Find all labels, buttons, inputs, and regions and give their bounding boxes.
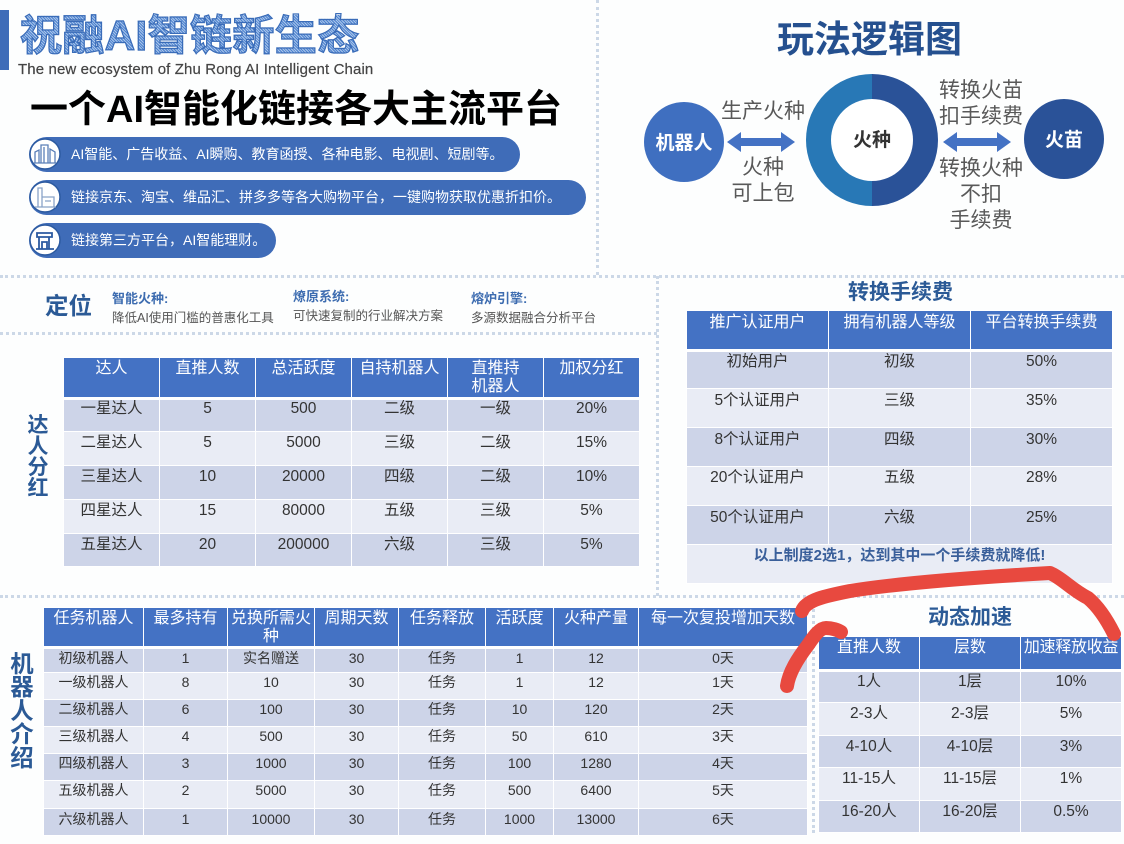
table: task robots: 610 xyxy=(584,728,608,744)
table: expert dividends: 5 xyxy=(203,434,212,451)
table: expert dividends: 200000 xyxy=(278,536,329,553)
table: conversion fee: 8个认证用户 xyxy=(714,431,801,448)
table: task robots: 任务机器人 xyxy=(53,610,134,627)
table: dynamic acceleration xyxy=(819,637,1121,832)
table: task robots: 3 xyxy=(182,755,189,771)
table: expert dividends: 15% xyxy=(576,434,607,451)
table: task robots: 30 xyxy=(349,728,364,744)
item: furnace engine: 多源数据融合分析平台 xyxy=(471,311,596,325)
table: task robots: 5天 xyxy=(712,782,734,798)
table: task robots: 100 xyxy=(259,701,283,717)
table: expert dividends: 二级 xyxy=(384,400,415,417)
table: expert dividends: 直推人数 xyxy=(175,360,240,377)
table: expert dividends: 10% xyxy=(576,468,607,485)
table: conversion fee: 以上制度2选1，达到其中一个手续费就降低! xyxy=(754,547,1045,564)
table: task robots: 任务 xyxy=(428,755,456,771)
table: dynamic acceleration: 层数 xyxy=(954,639,986,656)
table: task robots: 6天 xyxy=(712,811,734,827)
item: prairie-fire system: 可快速复制的行业解决方案 xyxy=(293,309,443,323)
table: task robots: 30 xyxy=(349,650,364,666)
table: task robots: 6400 xyxy=(580,782,612,798)
table: dynamic acceleration: 直推人数 xyxy=(837,639,901,656)
table: dynamic acceleration: 11-15层 xyxy=(943,770,997,787)
table: task robots: 初级机器人 xyxy=(58,650,128,666)
table: expert dividends: 四星达人 xyxy=(80,502,142,519)
table: expert dividends: 加权分红 xyxy=(559,360,624,377)
table: conversion fee: 28% xyxy=(1026,469,1057,486)
table: expert dividends: 一星达人 xyxy=(80,400,142,417)
table: task robots: 二级机器人 xyxy=(58,701,128,717)
label: convert flame with fee xyxy=(939,79,1023,128)
vertical label: expert dividends: 人 xyxy=(28,435,48,458)
table: expert dividends: 五星达人 xyxy=(80,536,142,553)
icon: machinery xyxy=(29,224,61,256)
stroke: short hook xyxy=(787,628,841,686)
table: conversion fee: 五级 xyxy=(884,469,915,486)
table: expert dividends: 三级 xyxy=(480,536,511,553)
item: furnace engine xyxy=(471,291,596,325)
pill: AI services xyxy=(29,137,520,172)
table: expert dividends: 500 xyxy=(291,400,316,417)
table: expert dividends: 15 xyxy=(199,502,216,519)
table: task robots: 2天 xyxy=(712,701,734,717)
table: conversion fee: 50% xyxy=(1026,353,1057,370)
table: expert dividends: 20% xyxy=(576,400,607,417)
label: convert spark without fee: 转换火种 xyxy=(939,157,1023,180)
table: task robots: 任务 xyxy=(428,728,456,744)
positioning section xyxy=(45,289,596,325)
table: task robots: 12 xyxy=(588,674,604,690)
table: dynamic acceleration: 16-20层 xyxy=(942,803,998,820)
label: spark can be staked: 可上包 xyxy=(732,182,794,205)
vertical label: robot introduction: 人 xyxy=(10,698,34,724)
vertical label: robot introduction: 机 xyxy=(10,651,34,677)
table: dynamic acceleration: 5% xyxy=(1060,705,1082,722)
heading: conversion fee: 转换手续费 xyxy=(848,281,953,304)
subtitle: The new ecosystem of Zhu Rong AI Intelligent Chain xyxy=(18,61,373,78)
table: task robots: 1 xyxy=(182,811,189,827)
vertical label: expert dividends: 达 xyxy=(28,414,48,437)
table: task robots: 30 xyxy=(349,674,364,690)
item: prairie-fire system: 燎原系统: xyxy=(293,289,349,304)
table: conversion fee: 平台转换手续费 xyxy=(985,314,1098,331)
table: dynamic acceleration: 16-20人 xyxy=(841,803,897,820)
vertical label: expert dividends: 分 xyxy=(28,456,48,479)
donut: spark xyxy=(806,74,938,206)
table: conversion fee: 20个认证用户 xyxy=(710,469,805,486)
item: smart spark: 智能火种: xyxy=(112,291,168,306)
item: furnace engine: 熔炉引擎: xyxy=(471,291,527,306)
table: task robots: 30 xyxy=(349,811,364,827)
table: conversion fee: 50个认证用户 xyxy=(710,509,805,526)
table: conversion fee: 初级 xyxy=(884,353,915,370)
title: 祝融AI智链新生态 xyxy=(20,12,360,59)
table: task robots: 8 xyxy=(182,674,189,690)
table: conversion fee: 初始用户 xyxy=(726,353,788,370)
table: conversion fee: 六级 xyxy=(884,509,915,526)
table: task robots: 4天 xyxy=(712,755,734,771)
label: convert spark without fee: 手续费 xyxy=(950,209,1012,232)
table: task robots: 任务释放 xyxy=(410,610,474,627)
table: task robots: 五级机器人 xyxy=(58,782,128,798)
table: dynamic acceleration: 2-3人 xyxy=(850,705,888,722)
table: task robots: 最多持有 xyxy=(153,610,218,627)
table: task robots: 500 xyxy=(508,782,531,798)
table: task robots: 六级机器人 xyxy=(58,811,128,827)
vertical label: robot introduction xyxy=(10,651,34,771)
pill: third-party finance xyxy=(29,223,276,258)
table: expert dividends: 达人 xyxy=(95,360,128,377)
logic diagram graphic xyxy=(644,74,1104,206)
table: task robots: 火种产量 xyxy=(564,610,628,627)
table: task robots: 500 xyxy=(259,728,283,744)
table: expert dividends: 二星达人 xyxy=(80,434,142,451)
table: task robots: 1000 xyxy=(255,755,287,771)
table: expert dividends: 直推持 xyxy=(471,360,520,377)
vertical label: robot introduction: 介 xyxy=(10,721,34,747)
table: task robots: 10 xyxy=(512,701,527,717)
table: expert dividends: 20000 xyxy=(282,468,325,485)
vertical label: robot introduction: 绍 xyxy=(10,745,34,771)
pill: shopping platforms xyxy=(29,180,586,215)
table: conversion fee: 5个认证用户 xyxy=(714,392,801,409)
table: conversion fee xyxy=(687,311,1112,583)
table: dynamic acceleration: 3% xyxy=(1060,738,1082,755)
table: expert dividends: 三级 xyxy=(480,502,511,519)
table: conversion fee: 三级 xyxy=(884,392,915,409)
label: spark can be staked: 火种 xyxy=(742,156,784,179)
table: task robots: 任务 xyxy=(428,811,456,827)
table: task robots: 120 xyxy=(584,701,608,717)
table: expert dividends: 总活跃度 xyxy=(271,360,336,377)
table: expert dividends: 三级 xyxy=(384,434,415,451)
heading: dynamic acceleration: 动态加速 xyxy=(928,606,1012,629)
arrow: spark to flame xyxy=(943,132,1011,152)
title accent bar xyxy=(0,10,9,70)
table: task robots: 1000 xyxy=(504,811,535,827)
item: smart spark xyxy=(112,291,274,325)
table: expert dividends: 一级 xyxy=(480,400,511,417)
table: task robots: 周期天数 xyxy=(324,610,388,627)
icon: factory xyxy=(29,181,61,213)
table: expert dividends: 10 xyxy=(199,468,216,485)
table: expert dividends: 5 xyxy=(203,400,212,417)
arrow: robot to spark xyxy=(727,132,795,152)
table: task robots: 10 xyxy=(263,674,279,690)
table: task robots: 一级机器人 xyxy=(58,674,128,690)
table: expert dividends: 5% xyxy=(580,536,603,553)
table: task robots: 5000 xyxy=(255,782,287,798)
table: task robots: 50 xyxy=(512,728,527,744)
heading: positioning: 定位 xyxy=(45,293,92,319)
label: produce spark: 生产火种 xyxy=(721,100,805,123)
table: dynamic acceleration: 4-10人 xyxy=(846,738,892,755)
table: dynamic acceleration: 1人 xyxy=(857,673,881,690)
table: expert dividends: 80000 xyxy=(282,502,325,519)
table: task robots: 1280 xyxy=(580,755,612,771)
table: expert dividends: 自持机器人 xyxy=(359,360,440,377)
table: conversion fee: 拥有机器人等级 xyxy=(843,314,956,331)
table: task robots: 活跃度 xyxy=(495,610,544,627)
table: task robots: 3天 xyxy=(712,728,734,744)
heading: logic diagram: 玩法逻辑图 xyxy=(777,19,962,60)
icon: buildings xyxy=(29,138,61,170)
table: task robots: 30 xyxy=(349,701,364,717)
circle: robot: 机器人 xyxy=(655,132,713,154)
table: conversion fee: 推广认证用户 xyxy=(709,314,806,331)
table: dynamic acceleration: 2-3层 xyxy=(951,705,989,722)
table: task robots: 6 xyxy=(182,701,189,717)
vertical label: expert dividends: 红 xyxy=(28,477,48,500)
pill: shopping platforms: 链接京东、淘宝、维品汇、拼多多等各大购物平台，一键购物获取优惠折扣价。 xyxy=(71,189,561,205)
table: task robots: 1 xyxy=(182,650,189,666)
label: convert flame with fee: 扣手续费 xyxy=(939,105,1023,128)
table: expert dividends: 20 xyxy=(199,536,216,553)
table: task robots: 10000 xyxy=(252,811,290,827)
label: convert spark without fee: 不扣 xyxy=(960,183,1002,206)
table: expert dividends: 六级 xyxy=(384,536,415,553)
table: conversion fee: 30% xyxy=(1026,431,1057,448)
table: dynamic acceleration: 4-10层 xyxy=(947,738,993,755)
label: convert flame with fee: 转换火苗 xyxy=(939,79,1023,102)
circle: flame: 火苗 xyxy=(1045,129,1083,151)
table: task robots: 0天 xyxy=(712,650,734,666)
table: task robots xyxy=(44,608,807,835)
table: expert dividends: 四级 xyxy=(384,468,415,485)
table: task robots: 任务 xyxy=(428,674,456,690)
pill: third-party finance: 链接第三方平台，AI智能理财。 xyxy=(71,232,266,248)
table: task robots: 1天 xyxy=(712,674,734,690)
table: conversion fee: 25% xyxy=(1026,509,1057,526)
table: expert dividends xyxy=(64,358,639,566)
table: dynamic acceleration: 10% xyxy=(1055,673,1087,690)
table: task robots: 三级机器人 xyxy=(58,728,128,744)
table: task robots: 任务 xyxy=(428,701,456,717)
table: task robots: 每一次复投增加天数 xyxy=(651,610,795,627)
table: dynamic acceleration: 1层 xyxy=(958,673,982,690)
table: task robots: 12 xyxy=(588,650,604,666)
table: task robots: 1 xyxy=(516,674,523,690)
table: conversion fee: 35% xyxy=(1026,392,1057,409)
table: task robots: 100 xyxy=(508,755,531,771)
vertical label: expert dividends xyxy=(28,414,48,500)
table: task robots: 四级机器人 xyxy=(58,755,128,771)
table: task robots: 任务 xyxy=(428,650,456,666)
table: dynamic acceleration: 1% xyxy=(1060,770,1082,787)
circle: flame xyxy=(1024,99,1104,179)
label: convert spark without fee xyxy=(939,157,1023,232)
donut: spark: 火种 xyxy=(853,129,891,151)
table: expert dividends: 5000 xyxy=(286,434,321,451)
table: task robots: 13000 xyxy=(577,811,615,827)
table: expert dividends: 二级 xyxy=(480,468,511,485)
table: dynamic acceleration: 0.5% xyxy=(1053,803,1089,820)
main heading: 一个AI智能化链接各大主流平台 xyxy=(30,89,562,131)
table: expert dividends: 五级 xyxy=(384,502,415,519)
table: task robots: 4 xyxy=(182,728,189,744)
table: task robots: 2 xyxy=(182,782,189,798)
item: prairie-fire system xyxy=(293,289,443,323)
table: task robots: 30 xyxy=(349,755,364,771)
table: task robots: 实名赠送 xyxy=(243,650,299,666)
table: expert dividends: 机器人 xyxy=(471,378,520,395)
table: expert dividends: 三星达人 xyxy=(80,468,142,485)
table: task robots: 任务 xyxy=(428,782,456,798)
table: conversion fee: 四级 xyxy=(884,431,915,448)
circle: robot xyxy=(644,102,724,182)
table: expert dividends: 二级 xyxy=(480,434,511,451)
item: smart spark: 降低AI使用门槛的普惠化工具 xyxy=(112,311,274,325)
table: task robots: 30 xyxy=(349,782,364,798)
pill: AI services: AI智能、广告收益、AI瞬购、教育函授、各种电影、电视剧、短剧等。 xyxy=(71,146,503,162)
table: expert dividends: 5% xyxy=(580,502,603,519)
table: dynamic acceleration: 11-15人 xyxy=(842,770,896,787)
table: dynamic acceleration: 加速释放收益 xyxy=(1024,639,1118,656)
table: task robots: 兑换所需火种 xyxy=(231,610,311,645)
table: task robots: 1 xyxy=(516,650,523,666)
label: spark can be staked xyxy=(732,156,794,205)
vertical label: robot introduction: 器 xyxy=(10,674,34,700)
stroke: long arc over dynamic acceleration xyxy=(802,573,1114,634)
